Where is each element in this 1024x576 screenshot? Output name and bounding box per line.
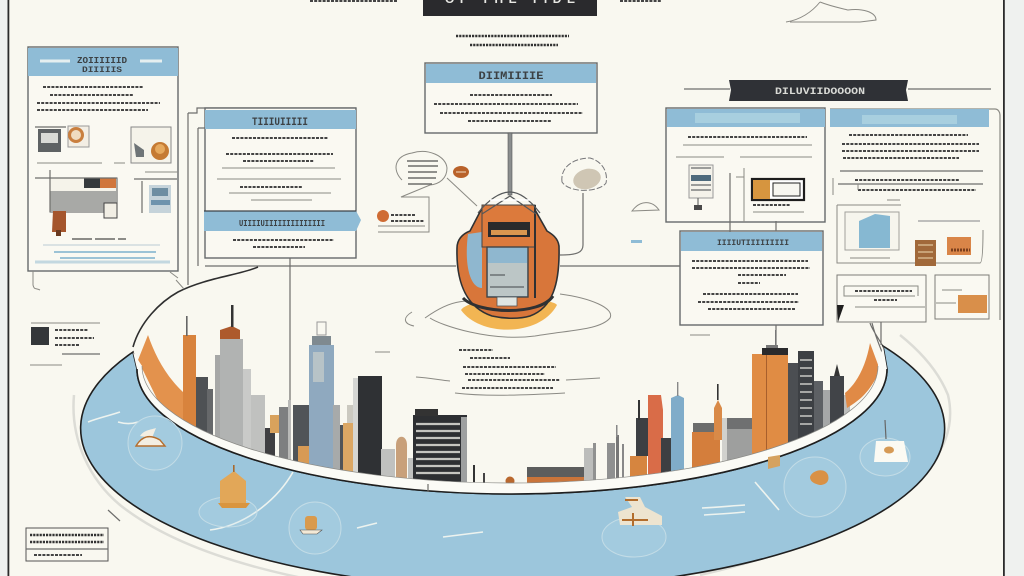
- small orange box card: [935, 275, 989, 319]
- panel: right upper-right card: [830, 109, 1000, 320]
- panel: center top card: [425, 63, 597, 133]
- base glow: [405, 294, 611, 337]
- left orange hill: [138, 335, 183, 425]
- icon: monitor thumbnail: [35, 127, 66, 152]
- panel: right upper-left card: [666, 108, 825, 222]
- right tall row: [630, 382, 752, 484]
- panel: left article card: DIIIIIS: [82, 66, 122, 75]
- top header fragments: [310, 0, 662, 2]
- bubble: ferry: [602, 497, 666, 557]
- panel: center top card: DIIMIIIIE: [478, 71, 544, 83]
- bubble: golden house boat: [199, 465, 257, 527]
- central blue tower: [309, 322, 353, 472]
- boats in bubbles: [128, 416, 910, 557]
- central device: [405, 192, 611, 337]
- stray sketch ticks: [108, 510, 120, 521]
- right title banner: [684, 80, 991, 101]
- bubble: white sailboat: [860, 420, 910, 476]
- panel: middle-left text card: [204, 108, 361, 258]
- small sketch marks: [375, 335, 710, 381]
- support pole: [508, 133, 512, 195]
- bubble: pavilion boat: [128, 416, 182, 470]
- panel: right lower card: IIIIUTIIIIIIIII: [717, 238, 789, 248]
- orange tower right: [752, 330, 880, 459]
- legend box: [26, 528, 108, 561]
- illustration: small chart card: [134, 179, 177, 213]
- ribbon label: UIIIIUIIIIIIIIIIIIII: [239, 219, 325, 229]
- right title banner: DILUVIIDOOOON: [775, 87, 865, 98]
- small report box: [837, 275, 926, 322]
- panel: right lower card: [650, 231, 823, 325]
- left thought bubble: [378, 151, 477, 232]
- icon: document with coffee: [131, 127, 171, 163]
- map illustration card: [837, 200, 983, 266]
- river ring: [73, 335, 950, 576]
- skyline: [138, 305, 880, 489]
- small blue tag: [631, 240, 642, 243]
- white quay band: [133, 346, 887, 494]
- top-right cloud sketch: [786, 2, 876, 22]
- ribbon label: [204, 211, 361, 231]
- top title banner: [423, 0, 597, 16]
- black tower: [353, 376, 413, 486]
- bubble: shell: [784, 457, 846, 517]
- panel: left article card: [28, 47, 178, 271]
- left towers: [183, 305, 309, 464]
- panel: middle-left text card: TIIIUIIIII: [252, 117, 308, 129]
- icon: screen with orange panel: [752, 179, 804, 200]
- right bubble with stone icon: [560, 158, 606, 255]
- icon: orange bun: [453, 166, 469, 178]
- left small icon block: [30, 323, 100, 365]
- striped office: [413, 409, 514, 489]
- ripple strokes: [88, 412, 779, 537]
- icon: info board: [689, 165, 713, 210]
- small cloud mark: [632, 203, 659, 211]
- icon: round clock badge: [68, 126, 89, 147]
- illustration: kitchen counter: [35, 170, 117, 236]
- callout with orange dot: [377, 210, 425, 226]
- intro text: [456, 36, 569, 45]
- right low buildings: [527, 425, 624, 488]
- left card stand lines: [33, 271, 184, 290]
- connector lines: [133, 108, 680, 420]
- bubble: small tug: [289, 502, 341, 554]
- panel: left article card: ZOIIIIIID: [77, 56, 128, 66]
- center caption text: [455, 350, 565, 395]
- capsule body: [457, 192, 559, 318]
